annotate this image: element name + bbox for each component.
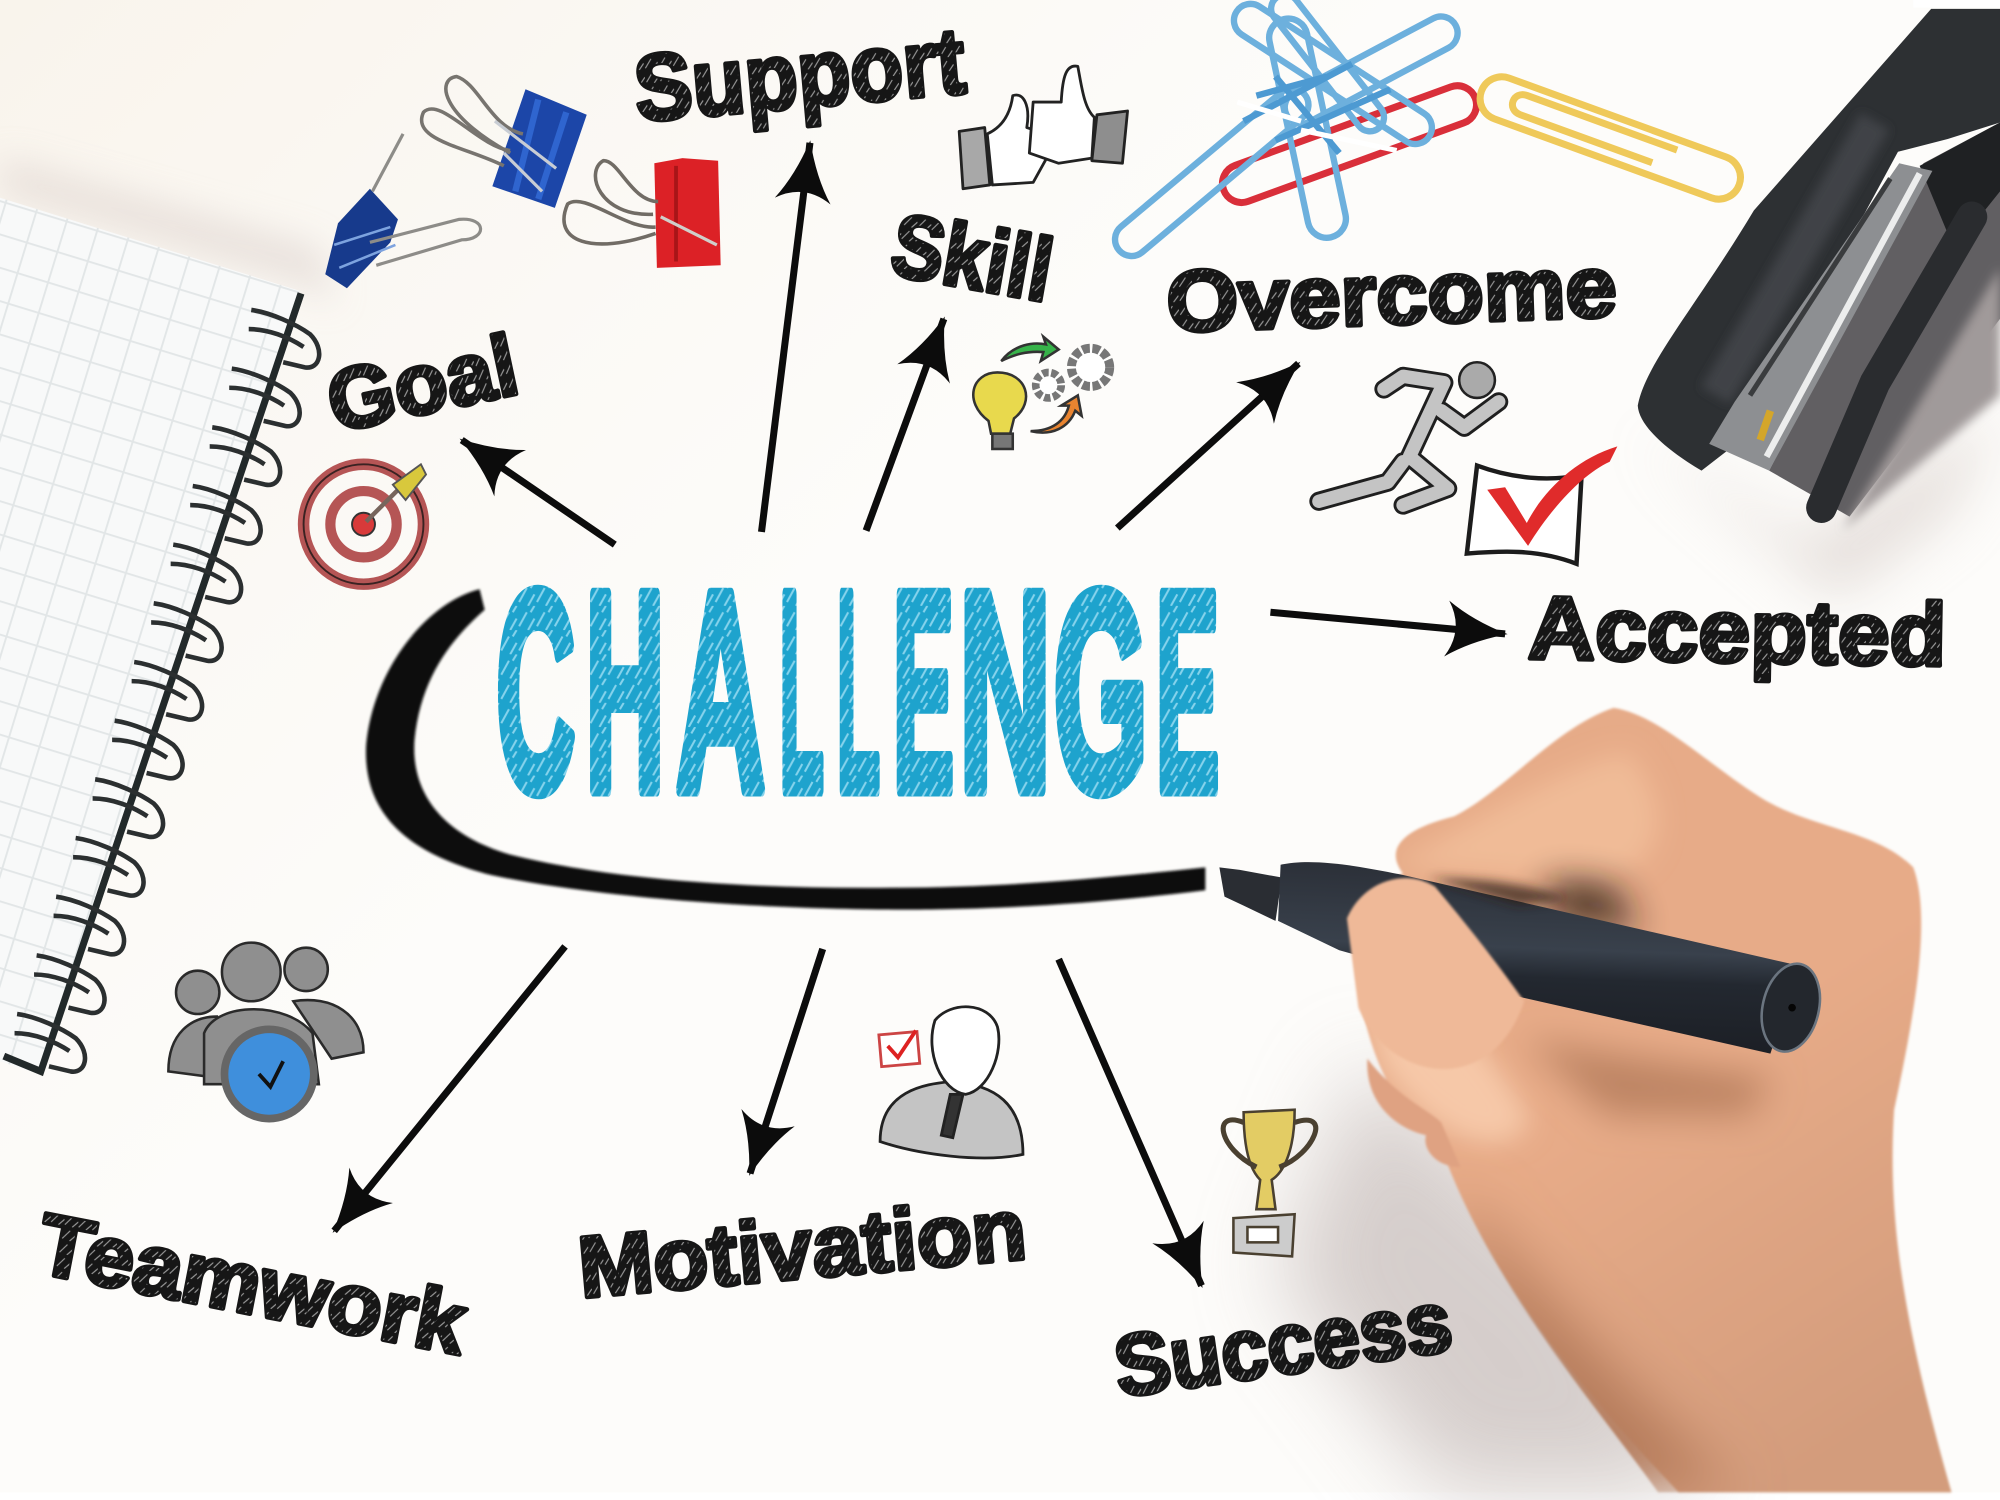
label: Skill: Skill	[884, 194, 1060, 320]
arrow to Goal	[462, 440, 615, 545]
label: Accepted: Accepted	[1527, 577, 1947, 685]
arrow to Motivation	[750, 949, 823, 1173]
label: Overcome: Overcome	[1165, 238, 1618, 351]
blue paper clips	[1108, 0, 1463, 263]
icon: trophy	[1223, 1110, 1316, 1256]
stapler	[1638, 9, 2000, 529]
notebook binding	[4, 293, 301, 1071]
icon: red check in box	[1467, 446, 1617, 564]
marker barrel	[1278, 862, 1798, 1054]
icon: target with dart	[304, 464, 426, 584]
title: CHALLENGE: H	[585, 535, 665, 851]
icon: runner	[1319, 362, 1499, 505]
label: Success: Success	[1108, 1273, 1458, 1416]
hand lower fingers	[1367, 1059, 1460, 1167]
label: Support: Support	[630, 9, 969, 142]
title: CHALLENGE: G	[1054, 535, 1148, 851]
arrow to Success	[1059, 959, 1202, 1286]
red paper clip	[1217, 80, 1482, 208]
icon: team with clock	[168, 943, 364, 1119]
red binder clip	[564, 158, 721, 268]
marker underline stroke	[366, 589, 1205, 910]
marker chisel tip	[1219, 867, 1282, 921]
icon: thumbs up	[959, 66, 1128, 189]
dark blue binder clip	[325, 134, 481, 288]
yellow paper clip	[1474, 71, 1747, 205]
hand	[1352, 708, 1952, 1492]
title: CHALLENGE: A	[676, 535, 765, 851]
title: CHALLENGE: L	[837, 535, 880, 851]
stapler base	[1769, 122, 2000, 517]
label: Motivation: Motivation	[574, 1181, 1030, 1316]
notebook	[0, 198, 319, 1074]
paper clips	[1108, 0, 1747, 263]
arrow to Skill	[866, 319, 944, 531]
notebook page	[0, 198, 300, 1074]
icon: businessman with checklist	[879, 1007, 1023, 1158]
arrow to Overcome	[1117, 364, 1298, 528]
arrow to Teamwork	[334, 946, 565, 1231]
stapler top	[1638, 9, 2000, 471]
thumb over marker	[1347, 878, 1524, 1069]
title: CHALLENGE: L	[779, 535, 824, 851]
label: Teamwork: Teamwork	[30, 1195, 475, 1373]
arrow to Support	[761, 143, 810, 532]
index finger shadow	[1429, 878, 1569, 906]
title: CHALLENGE: N	[959, 535, 1051, 851]
blue binder clip	[422, 77, 587, 208]
binder clips	[325, 77, 721, 288]
arrows	[334, 143, 1505, 1286]
label: Goal: Goal	[319, 316, 526, 451]
stapler metal channel	[1709, 163, 1932, 471]
marker end cap	[1753, 958, 1828, 1057]
notebook spiral coils	[15, 310, 319, 1072]
title: CHALLENGE: C	[496, 535, 575, 851]
icon: lightbulb and gears	[973, 337, 1110, 449]
hand palm	[1352, 708, 1952, 1492]
marker pen	[1219, 862, 1828, 1069]
arrow to Accepted	[1270, 612, 1505, 634]
title: CHALLENGE: E	[893, 535, 954, 851]
text: E	[1156, 535, 1219, 851]
